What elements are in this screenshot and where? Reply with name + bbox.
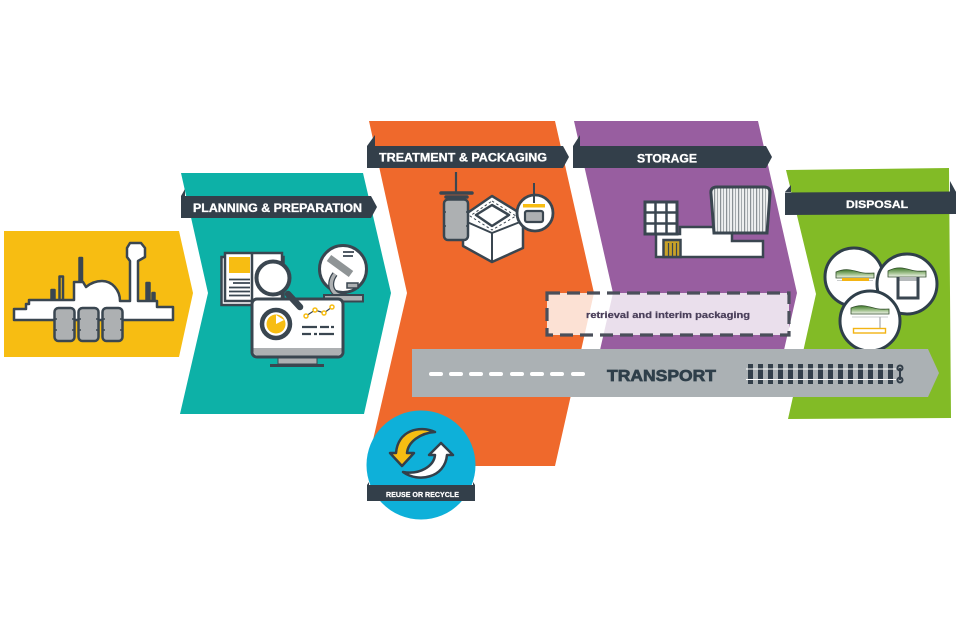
banner: planning and preparation [181, 189, 377, 218]
banner: storage [573, 135, 772, 168]
icon: deep geological disposal [840, 291, 900, 351]
banner: storage: STORAGE [637, 154, 697, 166]
icon: ribbed storage vault [711, 187, 770, 233]
icon: near-surface disposal [825, 248, 883, 306]
panel: site origin [4, 231, 193, 357]
icon: storage facility window grid [645, 202, 677, 234]
panel: planning and preparation [180, 173, 391, 414]
icon: waste container [463, 196, 523, 262]
arrow: transport [412, 349, 939, 397]
road dashes [429, 372, 585, 376]
callout: retrieval and interim packaging: retrieval and interim packaging [586, 310, 750, 321]
icon: microscope [320, 246, 366, 302]
panel: storage [574, 121, 797, 397]
banner: treatment and packaging [367, 135, 569, 168]
icon: computer monitor with charts [252, 299, 343, 367]
reuse label band: REUSE OR RECYCLE [386, 490, 459, 499]
icon: research book with magnifier [222, 253, 284, 305]
callout: retrieval and interim packaging [547, 293, 789, 335]
panel: disposal [786, 168, 951, 419]
icon: yellow recycle arrow [390, 429, 435, 466]
transport label: TRANSPORT [607, 368, 716, 385]
icon: drum lid detail [517, 183, 553, 231]
railway track [746, 364, 902, 384]
icon: nuclear site with waste drums [14, 243, 173, 341]
panel: treatment and packaging [367, 121, 594, 466]
icon: storage building [656, 227, 763, 257]
banner: disposal [785, 181, 956, 215]
badge: reuse or recycle [366, 410, 476, 520]
banner: disposal: DISPOSAL [846, 199, 908, 211]
icon: storage door [664, 240, 680, 257]
banner: treatment and packaging: TREATMENT & PACKAGING [379, 152, 547, 164]
icon: magnifying glass [256, 262, 300, 307]
icon: waste drum on crane [441, 172, 472, 240]
icon: intermediate depth disposal [877, 254, 937, 314]
icon: white recycle arrow [403, 443, 453, 478]
banner: planning and preparation: PLANNING & PREPARATION [193, 203, 362, 215]
